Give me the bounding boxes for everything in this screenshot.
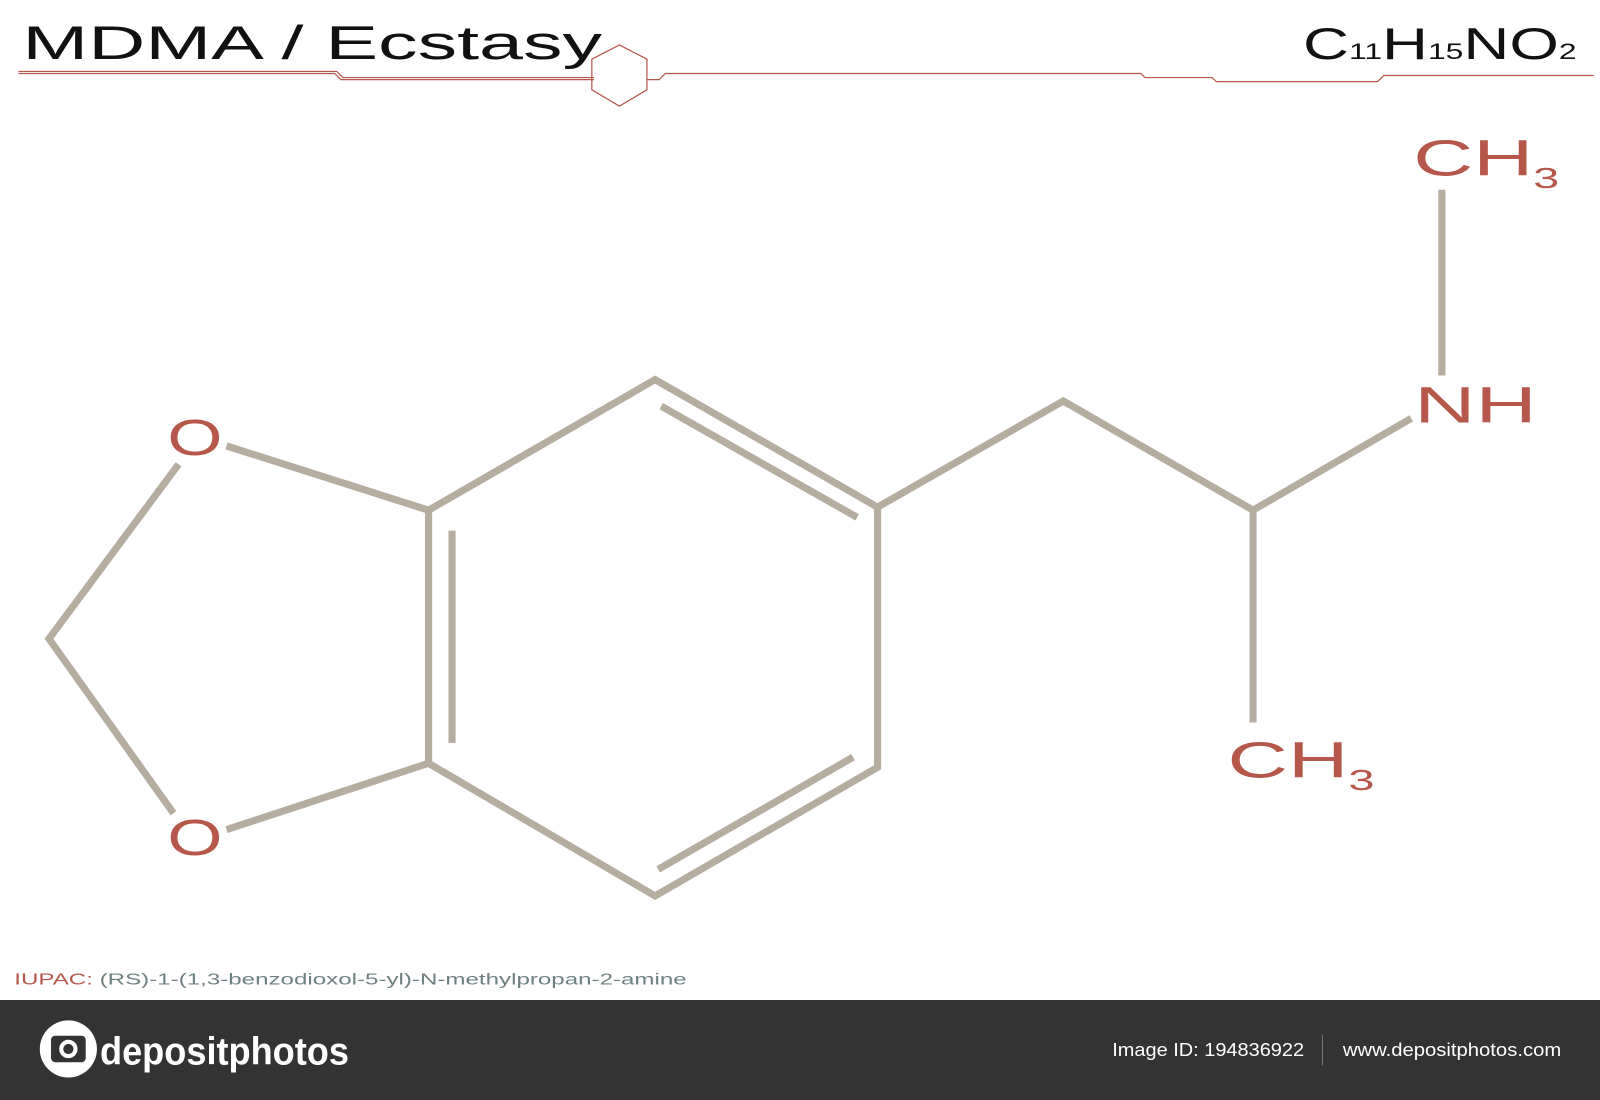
title: MDMA / Ecstasy	[22, 17, 603, 69]
website: www.depositphotos.com	[1342, 1039, 1561, 1060]
logo text: depositphotos	[100, 1030, 349, 1073]
dioxole ring bonds	[49, 446, 429, 830]
benzene ring	[429, 380, 878, 896]
IUPAC name: IUPAC: (RS)-1-(1,3-benzodioxol-5-yl)-N-methylpropan-2-amine	[14, 972, 687, 989]
atom labels	[167, 130, 1559, 866]
header line with hexagon	[18, 45, 1594, 106]
oxygen bottom: O	[167, 809, 222, 866]
CH3 top: 3	[1533, 163, 1559, 195]
oxygen top: O	[167, 409, 222, 466]
side chain	[878, 190, 1442, 722]
image id: Image ID: 194836922	[1112, 1039, 1304, 1060]
header	[18, 17, 1594, 106]
logo icon	[40, 1020, 97, 1078]
CH3 top: CH	[1413, 130, 1487, 187]
molecule structure	[49, 190, 1442, 896]
NH: NH	[1414, 376, 1537, 433]
CH3 bottom: CH	[1228, 732, 1301, 789]
footer bar	[0, 1000, 1600, 1100]
CH3 bottom: 3	[1348, 765, 1374, 797]
formula: C 11H 15NO 2	[1303, 18, 1577, 69]
